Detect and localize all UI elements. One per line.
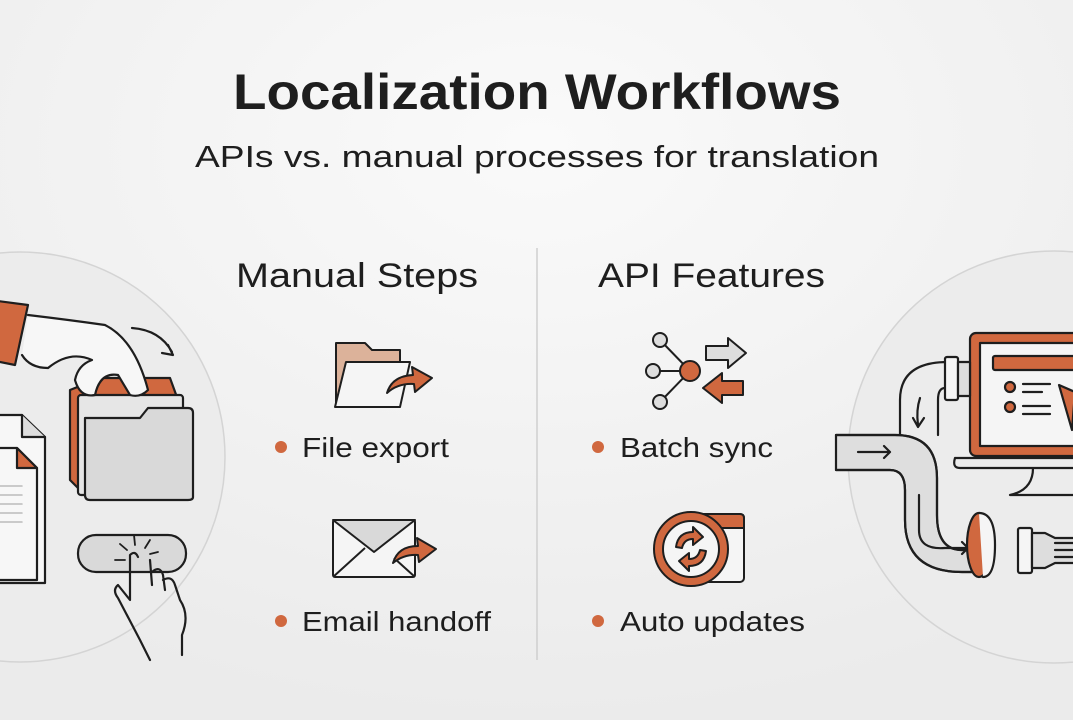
title: Localization Workflows [233, 64, 841, 120]
icon: auto updates [654, 512, 744, 586]
divider [536, 248, 538, 660]
illustration: API circle [836, 251, 1073, 663]
bullet: Batch sync: Batch sync [620, 432, 773, 463]
bullet: Auto updates: Auto updates [620, 606, 805, 637]
icon: network sync [646, 333, 746, 409]
icon: folder export [335, 343, 432, 407]
bullet: Email handoff: Email handoff [302, 606, 491, 637]
heading: Manual Steps: Manual Steps [236, 257, 478, 295]
illustration: manual circle [0, 252, 225, 662]
bullet: File export: File export [302, 432, 449, 463]
subtitle: APIs vs. manual processes for translation [195, 139, 879, 174]
heading: API Features: API Features [598, 257, 825, 295]
icon: email handoff [333, 520, 436, 577]
